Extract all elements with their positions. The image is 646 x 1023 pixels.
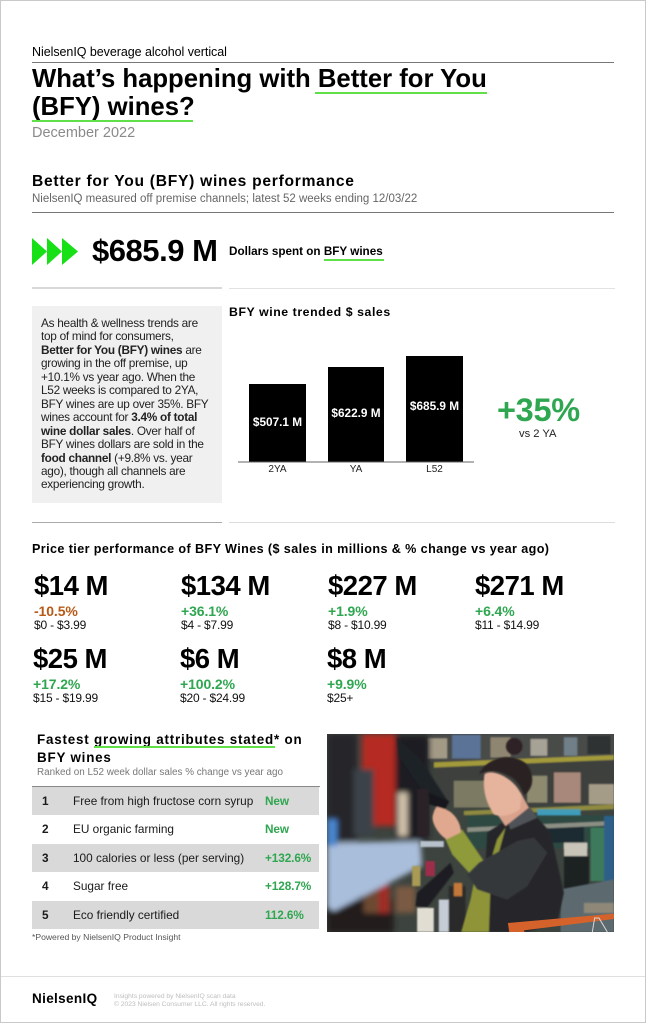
row 2: EU organic farming <box>73 822 174 836</box>
summary paragraph: experiencing growth. <box>41 477 144 491</box>
row 3: 100 calories or less (per serving) <box>73 851 244 865</box>
tier: $15-$19.99: $15 - $19.99 <box>33 691 98 705</box>
tier: $20-$24.99: $6 M <box>180 643 239 674</box>
footer logo: NielsenIQ <box>32 991 97 1006</box>
row 4: +128.7% <box>265 879 311 893</box>
bar YA: YA <box>350 464 363 475</box>
row 5: Eco friendly certified <box>73 908 179 922</box>
tier: $11-$14.99: $11 - $14.99 <box>475 618 539 632</box>
tier: $11-$14.99: +6.4% <box>475 603 515 619</box>
panel: summary text <box>32 306 222 503</box>
bar 2YA: $507.1 M <box>253 415 302 429</box>
summary paragraph: +10.1% vs year ago. When the <box>41 370 195 384</box>
woman <box>429 738 564 932</box>
summary paragraph: As health & wellness trends are <box>41 316 198 330</box>
summary paragraph: growing in the off premise, up <box>41 356 187 370</box>
label underline <box>324 259 384 261</box>
tier: $20-$24.99 <box>180 643 245 705</box>
icon: green triple arrows <box>32 238 78 265</box>
footer note: © 2023 Nielsen Consumer LLC. All rights reserved. <box>114 1001 265 1008</box>
tier: $11-$14.99: $271 M <box>475 570 564 601</box>
tier: $15-$19.99: +17.2% <box>33 676 80 692</box>
title underline 2 <box>32 120 193 122</box>
summary paragraph: BFY wines dollars are sold in the <box>41 437 204 451</box>
row 2 <box>42 822 289 836</box>
tier: $4-$7.99 <box>181 570 270 632</box>
chart heading: BFY wine trended $ sales <box>229 305 391 319</box>
tier: $15-$19.99 <box>33 643 107 705</box>
tier: $8-$10.99 <box>328 570 417 632</box>
shopping cart <box>508 914 614 932</box>
summary paragraph: food channel (+9.8% vs. year <box>41 451 192 465</box>
summary paragraph <box>41 316 208 491</box>
summary paragraph: Better for You (BFY) wines are <box>41 343 202 357</box>
section subheading: NielsenIQ measured off premise channels; latest 52 weeks ending 12/03/22 <box>32 193 417 205</box>
row 3 <box>32 844 319 872</box>
bar L52: L52 <box>426 464 443 475</box>
row 5: 5 <box>42 908 49 922</box>
tier: $4-$7.99: $134 M <box>181 570 270 601</box>
tier: $25+ <box>327 643 386 705</box>
summary paragraph: ago), though all channels are <box>41 464 185 478</box>
shelves background <box>427 734 614 932</box>
tier: $4-$7.99: +36.1% <box>181 603 228 619</box>
date: December 2022 <box>32 125 135 141</box>
footnote: *Powered by NielsenIQ Product Insight <box>32 932 181 942</box>
row 2: 2 <box>42 822 49 836</box>
heading underline <box>94 746 275 748</box>
row 4 <box>42 879 311 893</box>
tier: $15-$19.99: $25 M <box>33 643 107 674</box>
row 5: 112.6% <box>265 908 304 922</box>
tier: $20-$24.99: $20 - $24.99 <box>180 691 245 705</box>
attributes heading <box>37 732 302 765</box>
tier: $0-$3.99: -10.5% <box>34 603 78 619</box>
section heading: Better for You (BFY) wines performance <box>32 173 355 190</box>
tier: $25+: $25+ <box>327 691 353 705</box>
price tier heading: Price tier performance of BFY Wines ($ sales in millions & % change vs year ago) <box>32 542 549 556</box>
title <box>32 65 487 121</box>
row 2: New <box>265 822 289 836</box>
attributes subheading: Ranked on L52 week dollar sales % change vs year ago <box>37 767 283 778</box>
row 4: Sugar free <box>73 879 128 893</box>
callout label: vs 2 YA <box>519 428 557 440</box>
callout: +35%: +35% <box>497 392 580 428</box>
footer note: Insights powered by NielsenIQ scan data <box>114 993 236 1000</box>
tier: $0-$3.99: $14 M <box>34 570 108 601</box>
table: attributes <box>32 787 319 929</box>
row 5 <box>32 901 319 929</box>
tier: $25+: +9.9% <box>327 676 367 692</box>
title: (BFY) wines? <box>32 93 195 121</box>
bar 2YA: 2YA <box>268 464 287 475</box>
attributes heading: Fastest growing attributes stated* on <box>37 732 302 747</box>
summary paragraph: L52 weeks is compared to 2YA, <box>41 383 198 397</box>
attributes heading: BFY wines <box>37 750 112 765</box>
title underline 1 <box>315 92 487 94</box>
eyebrow text: NielsenIQ beverage alcohol vertical <box>32 45 227 59</box>
tier: $8-$10.99: $227 M <box>328 570 417 601</box>
bar 2YA <box>249 384 306 475</box>
row 3: 3 <box>42 851 49 865</box>
summary paragraph: top of mind for consumers, <box>41 329 174 343</box>
row 1: New <box>265 794 289 808</box>
bar L52 <box>406 356 463 475</box>
tier: $8-$10.99: $8 - $10.99 <box>328 618 387 632</box>
summary paragraph: wines account for 3.4% of total <box>41 410 197 424</box>
bar YA: $622.9 M <box>331 406 381 420</box>
tier: $0-$3.99: $0 - $3.99 <box>34 618 86 632</box>
row 1: 1 <box>42 794 49 808</box>
title: What’s happening with Better for You <box>32 65 487 93</box>
tier: $8-$10.99: +1.9% <box>328 603 368 619</box>
bar L52: $685.9 M <box>410 399 459 413</box>
row 3: +132.6% <box>265 851 311 865</box>
tier: $25+: $8 M <box>327 643 386 674</box>
tier: $0-$3.99 <box>34 570 108 632</box>
bar YA <box>328 367 384 475</box>
tier: $4-$7.99: $4 - $7.99 <box>181 618 233 632</box>
tier: $20-$24.99: +100.2% <box>180 676 235 692</box>
row 4: 4 <box>42 879 49 893</box>
summary paragraph: BFY wines are up over 35%. BFY <box>41 397 208 411</box>
bar chart <box>238 356 474 475</box>
photo: shopper browsing wine shelves <box>327 734 614 932</box>
row 1 <box>32 787 319 815</box>
headline label: Dollars spent on BFY wines <box>229 245 383 258</box>
foreground bottles blurred <box>327 734 429 933</box>
summary paragraph: wine dollar sales. Over half of <box>41 424 195 438</box>
tier: $11-$14.99 <box>475 570 564 632</box>
footer note <box>114 993 265 1008</box>
headline figure: $685.9 M <box>92 233 218 268</box>
row 1: Free from high fructose corn syrup <box>73 794 253 808</box>
